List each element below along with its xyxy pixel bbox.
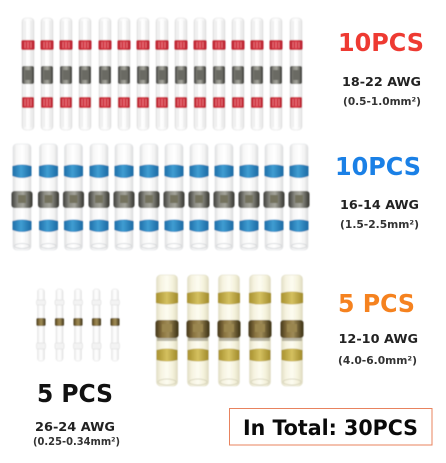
label: yellow cross-section: (4.0-6.0mm²)	[338, 354, 417, 367]
label: white cross-section: (0.25-0.34mm²)	[33, 436, 120, 448]
callout: total count: In Total: 30PCS	[243, 416, 418, 440]
connectors: small white row of 5	[36, 289, 120, 361]
label: blue gauge: 16-14 AWG	[340, 197, 419, 212]
label: red quantity: 10PCS	[338, 28, 424, 57]
connectors: red row of 15	[22, 18, 302, 130]
label: red gauge: 18-22 AWG	[342, 74, 421, 89]
connectors: blue row of 12	[12, 144, 310, 250]
label: white quantity: 5 PCS	[37, 379, 113, 408]
label: white gauge: 26-24 AWG	[35, 419, 115, 434]
label: blue quantity: 10PCS	[335, 152, 421, 181]
connectors: yellow row of 5	[156, 275, 304, 386]
label: yellow quantity: 5 PCS	[338, 289, 415, 318]
callout: total count	[230, 408, 432, 445]
label: red cross-section: (0.5-1.0mm²)	[343, 95, 421, 108]
label: blue cross-section: (1.5-2.5mm²)	[340, 218, 419, 231]
label: yellow gauge: 12-10 AWG	[338, 331, 418, 346]
